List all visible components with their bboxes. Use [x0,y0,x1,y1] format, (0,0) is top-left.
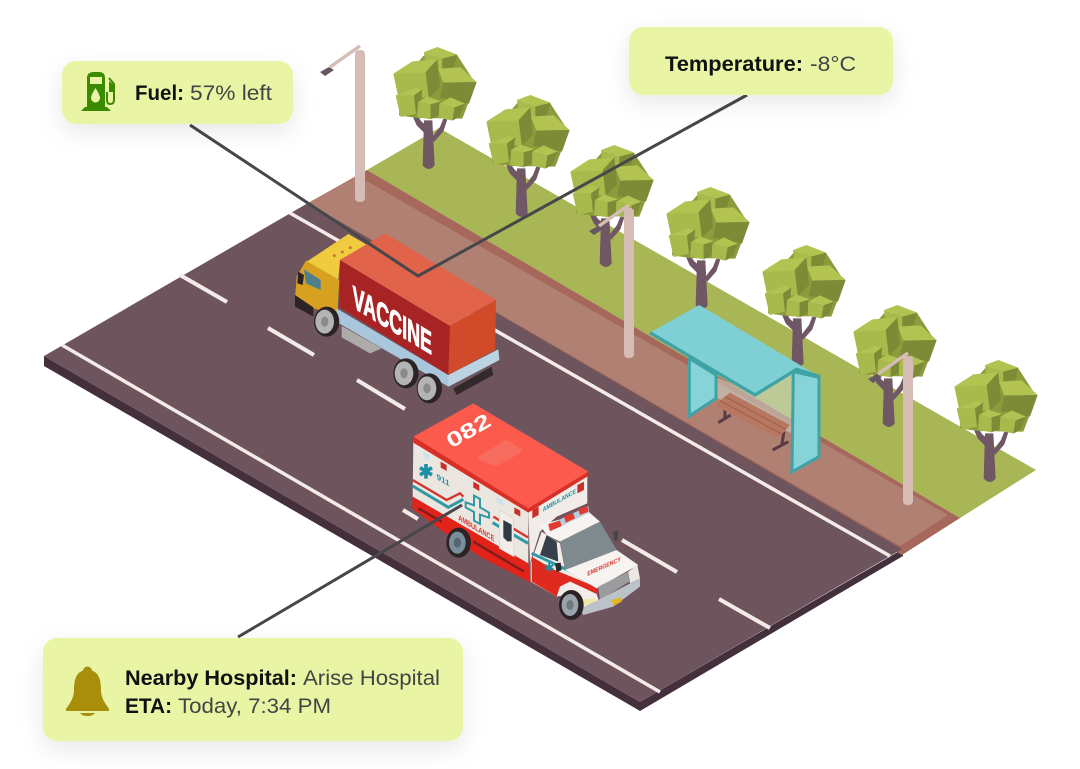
911 label: 911 [437,472,450,489]
fuel tank [342,326,382,353]
bench [714,393,790,450]
shelter back glass [717,373,792,433]
door handle [503,520,512,541]
tree 2 [486,95,570,217]
tree 7 [954,360,1038,482]
VACCINE lettering: VACCINE [353,280,432,362]
shelter roof [650,305,818,395]
truck [295,233,499,403]
tree 3 [570,145,654,267]
side windows [423,452,503,507]
ETA text: Today, 7:34 PM [178,695,331,718]
skirt trim [418,508,524,572]
red stripe [413,480,528,537]
fuel text: 57% left [190,82,272,105]
chassis front strip [448,349,499,387]
street lamp 1 [320,46,365,202]
cab window [304,269,321,290]
hospital text: Nearby Hospital: [125,667,297,690]
ambulance [412,403,640,620]
street lamp 2 [589,205,634,358]
side window [540,535,558,562]
hospital text: Arise Hospital [303,667,440,690]
box side [413,440,528,565]
temperature text: Temperature: [665,53,803,76]
headlight [583,598,595,605]
cab teal stripe [532,553,597,584]
bus shelter [650,305,820,472]
bumper [580,578,640,615]
container side [339,260,450,375]
door mirror [555,563,562,572]
roof edge [650,333,820,395]
mirror [613,531,618,542]
grille [598,572,629,600]
connector: fuel to truck, truck to temperature [190,95,747,276]
box front [528,475,587,563]
rear wheel [446,528,471,558]
rear axle [453,367,493,395]
side lettering: AMBULANCE [458,513,494,544]
road slab edge [44,356,903,711]
light bar [548,506,589,532]
icon: bell [66,666,109,716]
rear wheel 2 [417,373,442,403]
cross emblem [466,496,489,524]
road edge line, far side [290,213,890,556]
side door [499,510,514,557]
centre lane dashes [180,275,770,628]
tree 5 [762,245,846,367]
roof [413,403,588,508]
kerb strip [308,170,960,555]
side light [628,565,640,583]
callout: hospital [43,638,463,741]
cab lower red [532,557,597,597]
hood [565,550,638,588]
fuel text: Fuel: [135,82,184,105]
windshield [560,522,617,570]
cab door [531,532,597,597]
roof hatch [478,440,522,466]
front wheel [314,307,339,337]
cab side [295,261,339,315]
number plate [612,597,622,606]
chassis [336,308,499,387]
callout: temperature [629,27,893,95]
teal stripe [413,486,528,543]
icon: fuel pump [81,72,114,111]
road surface [44,203,902,702]
front fender [560,582,599,615]
road edge line, near side [62,345,660,692]
ETA text: ETA: [125,695,172,718]
street lamp 3 [868,353,913,505]
mirror [297,272,304,285]
front lettering: AMBULANCE [543,487,576,514]
tree 4 [666,187,750,309]
door star [545,563,553,572]
grass verge [367,128,1036,518]
container end [448,300,496,375]
cab roof [307,234,367,280]
container top [340,233,496,326]
shelter right panel [792,372,819,472]
rear wheel 1 [393,358,419,388]
temperature text: -8°C [810,53,856,76]
cab bumper [295,295,313,317]
shelter left panel [689,358,716,416]
star of life [420,464,432,479]
callout: fuel [62,61,293,124]
side lights [441,462,520,517]
connector: hospital to ambulance [238,505,462,637]
cab roof [540,512,600,542]
vehicle number: 082 [442,409,495,453]
tree 6 [853,305,937,427]
hood lettering: EMERGENCY [587,556,621,578]
front wheel [559,590,584,620]
pavement [308,176,948,546]
roof markers [334,248,350,256]
roof edge [413,437,588,513]
tree 1 [393,47,477,169]
front marker lights [532,482,584,518]
red skirt [412,497,531,583]
